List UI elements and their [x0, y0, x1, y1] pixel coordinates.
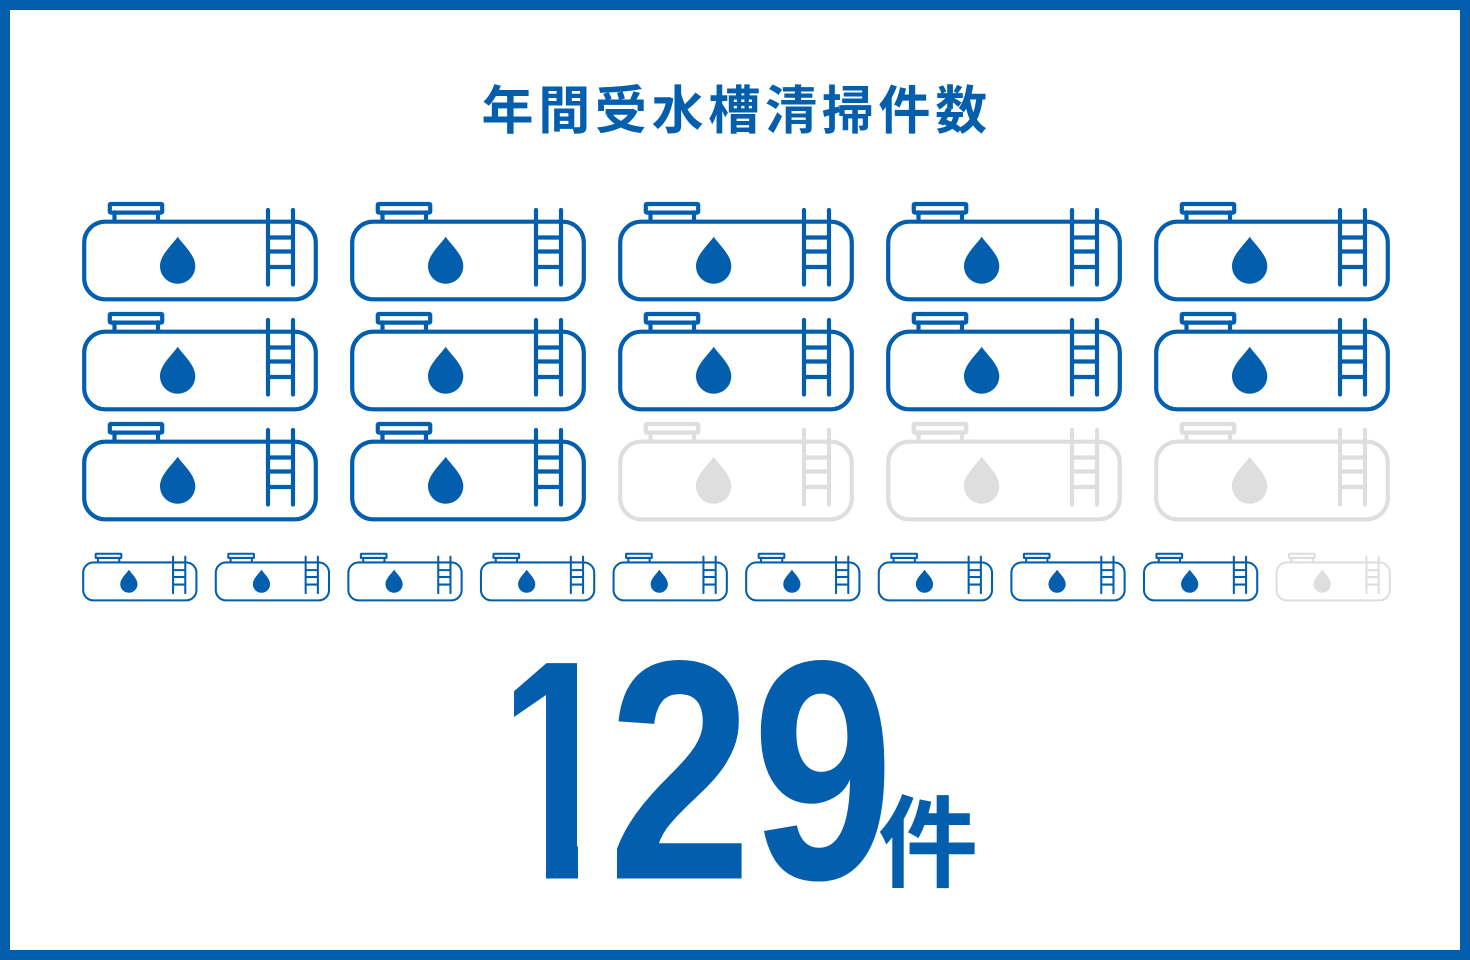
tank row 2 — [84, 314, 1388, 409]
title: 年間受水槽清掃件数 — [482, 83, 992, 141]
pictogram: small tanks, 9 of 10 filled — [83, 554, 1390, 600]
big number 129: 2 — [608, 595, 752, 945]
tank row 1 — [84, 204, 1388, 299]
unit label: 件 — [878, 789, 978, 901]
big number 129: 1 — [490, 596, 621, 945]
tank row 3: empty grey tanks — [620, 424, 1388, 519]
tank row 3: filled tanks — [84, 424, 584, 519]
small filled tanks — [83, 554, 1257, 600]
big number 129: 9 — [752, 596, 894, 945]
small empty grey tank — [1277, 554, 1390, 600]
pictogram: large tanks, 10 of 15 filled (each = 10 cases) — [84, 204, 1388, 519]
big number 129 — [514, 660, 884, 882]
